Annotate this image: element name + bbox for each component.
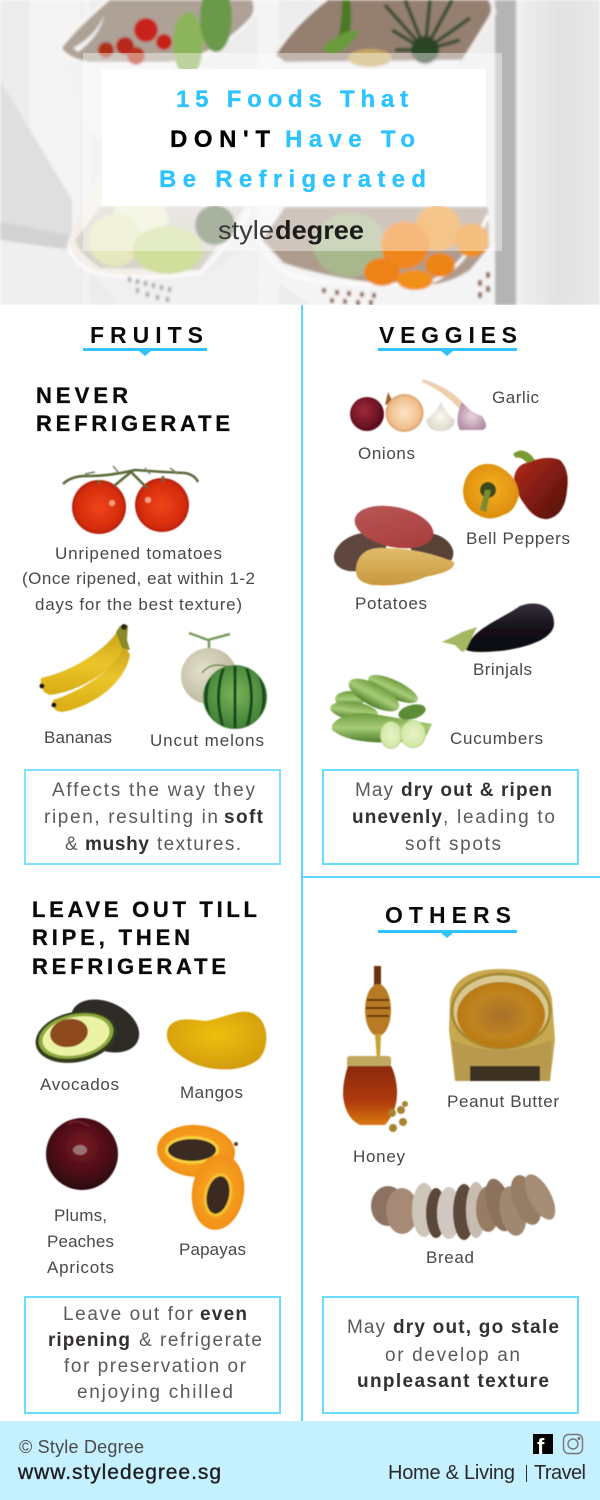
icon: brinjal [442,603,554,652]
icon: plum [46,1118,118,1190]
icon: mango [167,1012,266,1069]
callout: fruits never refrigerate: & [65,834,78,855]
callout: fruits never refrigerate: Affects the way they [52,780,256,801]
label: unripened tomatoes: (Once ripened, eat within 1-2 [22,569,255,588]
label: papayas: Papayas [179,1240,246,1259]
logo: styledegree: style [218,215,274,245]
icon: papaya [155,1122,249,1233]
callout: veggies [323,770,578,864]
icon: bananas [40,624,130,712]
callout: veggies: , leading to [443,807,555,828]
top left food [134,18,158,42]
bottom left basket [67,220,89,266]
icon: potatoes [328,499,458,585]
copyright: © Style Degree [19,1437,144,1457]
label: potatoes: Potatoes [355,594,427,613]
heading: never refrigerate: NEVER [36,383,128,408]
title line 3: Be Refrigerated [159,166,426,193]
callout: others: or develop an [385,1345,520,1366]
label: brinjals: Brinjals [473,660,532,679]
callout: veggies: unevenly [352,807,442,828]
title line 1: 15 Foods That [176,86,408,113]
callout: veggies: soft spots [405,834,501,855]
callout: leave out till ripe: & refrigerate [139,1330,262,1351]
heading: never refrigerate: REFRIGERATE [36,411,230,436]
logo: styledegree: degree [275,215,364,245]
heading: leave out till ripe: RIPE, THEN [32,925,190,950]
callout: others: dry out, go stale [393,1317,559,1338]
label: peanut butter: Peanut Butter [447,1092,559,1111]
label: uncut melons: Uncut melons [150,731,264,750]
footer links [388,1462,586,1484]
label: onions: Onions [358,444,415,463]
label: avocados: Avocados [40,1075,119,1094]
callout: fruits never refrigerate: mushy [85,834,149,855]
footer [0,1421,600,1500]
title line 2: Have To: Have To [285,126,415,153]
callout: leave out till ripe: for preservation or [64,1356,247,1377]
callout: leave out till ripe: enjoying chilled [77,1382,233,1403]
icon: facebook: f [537,1434,545,1459]
icon: melons [181,633,267,730]
footer links: Home & Living [388,1462,515,1484]
heading: never refrigerate [36,383,230,436]
panel: others heading: OTHERS [385,902,511,928]
heading: leave out till ripe: REFRIGERATE [32,954,226,979]
bottom left food [195,205,235,245]
callout: leave out till ripe: even [200,1304,247,1325]
top right food [338,0,352,36]
title line 2: DON'T: DON'T [170,126,270,153]
label: bananas: Bananas [44,728,112,747]
callout: others: May [347,1317,386,1338]
icon: avocado [31,989,148,1070]
label: plums peaches apricots: Peaches [47,1232,114,1251]
footer links: Travel [534,1462,586,1484]
label: unripened tomatoes [22,544,255,614]
callout: others: unpleasant texture [357,1371,549,1392]
icon: facebook [533,1434,553,1459]
callout: fruits never refrigerate [25,770,280,864]
bottom right basket [262,207,490,285]
icon: onions and garlic [350,379,486,432]
heading: leave out till ripe: LEAVE OUT TILL [32,897,257,922]
website: www.styledegree.sg [17,1461,221,1484]
callout: veggies: May [355,780,394,801]
translucent title plate [83,53,502,251]
label: unripened tomatoes: days for the best texture) [35,595,242,614]
panel: veggies heading: VEGGIES [379,322,517,348]
icon: peanut butter jar [449,969,555,1081]
callout: fruits never refrigerate: soft [224,807,264,828]
heading: leave out till ripe [32,897,257,979]
callout: veggies: dry out & ripen [401,780,552,801]
callout: fruits never refrigerate: textures. [157,834,241,855]
label: plums peaches apricots: Apricots [47,1258,114,1277]
label: honey: Honey [353,1147,406,1166]
label: bell peppers: Bell Peppers [466,529,570,548]
icon: bread slices [371,1170,561,1240]
label: plums peaches apricots: Plums, [54,1206,107,1225]
panel: fruits heading [83,322,207,356]
callout: others [323,1297,578,1413]
top left basket [91,2,256,53]
label: plums peaches apricots [47,1206,114,1277]
label: unripened tomatoes: Unripened tomatoes [55,544,222,563]
icon: tomatoes on the vine [63,466,198,534]
top right basket [493,8,498,16]
callout: leave out till ripe: Leave out for [63,1304,194,1325]
label: mangos: Mangos [180,1083,243,1102]
column dividers [301,305,600,1421]
panel: others heading [378,902,517,938]
icon: honey jar and dipper [343,966,408,1132]
hero photo: vegetable rack [0,0,600,305]
icon: instagram [564,1434,582,1454]
logo: styledegree [218,215,364,245]
callout: leave out till ripe: ripening [48,1330,130,1351]
bottom right food [313,213,387,277]
callout: fruits never refrigerate: ripen, resulting in [44,807,218,828]
label: bread: Bread [426,1248,474,1267]
callout: leave out till ripe [25,1297,280,1413]
icon: bell peppers [463,450,568,519]
label: cucumbers: Cucumbers [450,729,543,748]
label: garlic: Garlic [492,388,540,407]
title panel [102,69,486,206]
icon: cucumbers [329,669,432,749]
panel: fruits heading: FRUITS [90,322,203,348]
